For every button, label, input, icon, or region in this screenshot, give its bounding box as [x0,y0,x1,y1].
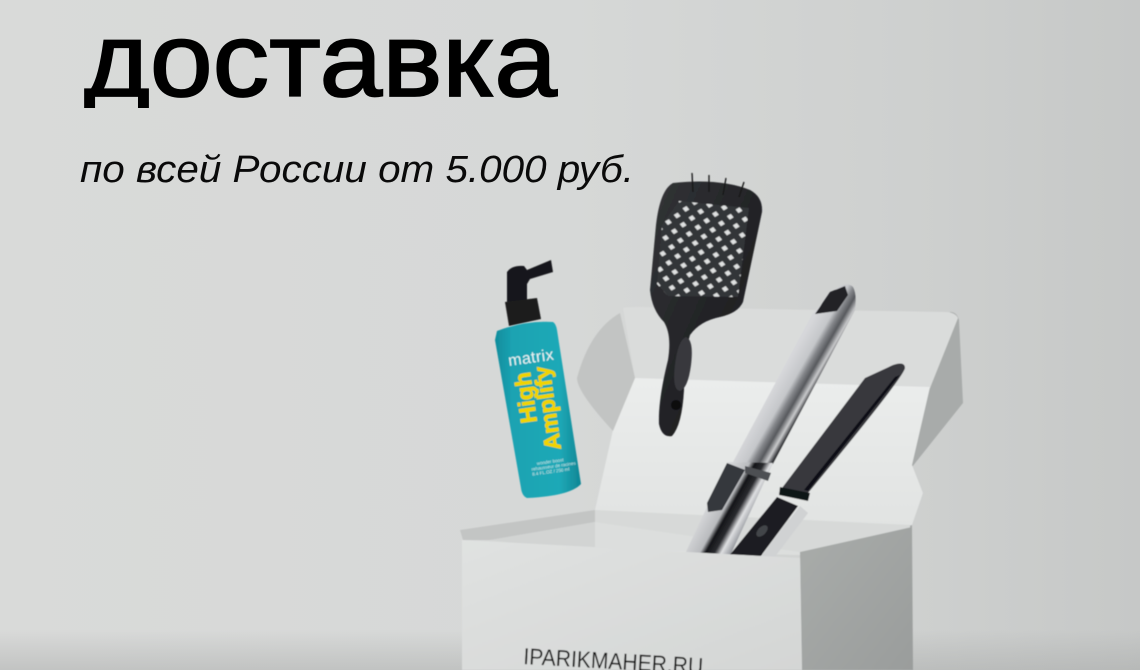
bottle small text: rehausseur de racines [531,461,577,472]
black band [779,487,810,501]
bottle collar [505,298,541,326]
subtitle: по всей России от 5.000 руб. [80,149,634,191]
hair brush [650,173,762,436]
bottle name: High [509,371,542,425]
shipping box [460,284,963,670]
brush handle hole [671,400,681,410]
box side panel [800,527,913,670]
brush hole field [657,201,749,297]
silver lower tube [685,462,773,556]
black plate [782,364,905,493]
box lid inner floor [592,378,930,555]
bottle nozzle [507,260,553,302]
title: доставка [84,2,558,119]
bottle name [509,365,566,452]
black handle [728,497,798,557]
silver grip [707,463,745,512]
silver tip [815,286,848,314]
spray bottle [495,260,581,498]
handle silver edge [761,506,808,558]
brush handle logo plate [674,337,692,391]
box interior left wall [490,522,595,549]
box lid inner back panel [623,307,958,388]
straightener silver [685,284,856,556]
brush hole grid [657,201,749,297]
brush body [650,182,762,436]
silver band [745,466,771,481]
power switch [754,523,770,539]
silver barrel [733,284,856,464]
box front panel [462,540,802,670]
bottle body [495,322,581,498]
box interior back wall [595,522,805,555]
bottle small text: 8.4 FL.OZ / 250 ml [532,467,570,477]
bottle small text [531,456,577,477]
plate dark edge [804,375,900,491]
box lid outer flap [880,312,963,530]
bottle name: Amplify [528,365,566,452]
box interior back lip [595,510,910,552]
brush bristles [692,173,744,197]
straightener black [728,364,905,558]
bottle brand: matrix [507,347,555,370]
bottle small text: wonder boost [536,457,565,466]
box interior left flap [460,510,595,540]
box lid left flap [577,313,635,431]
